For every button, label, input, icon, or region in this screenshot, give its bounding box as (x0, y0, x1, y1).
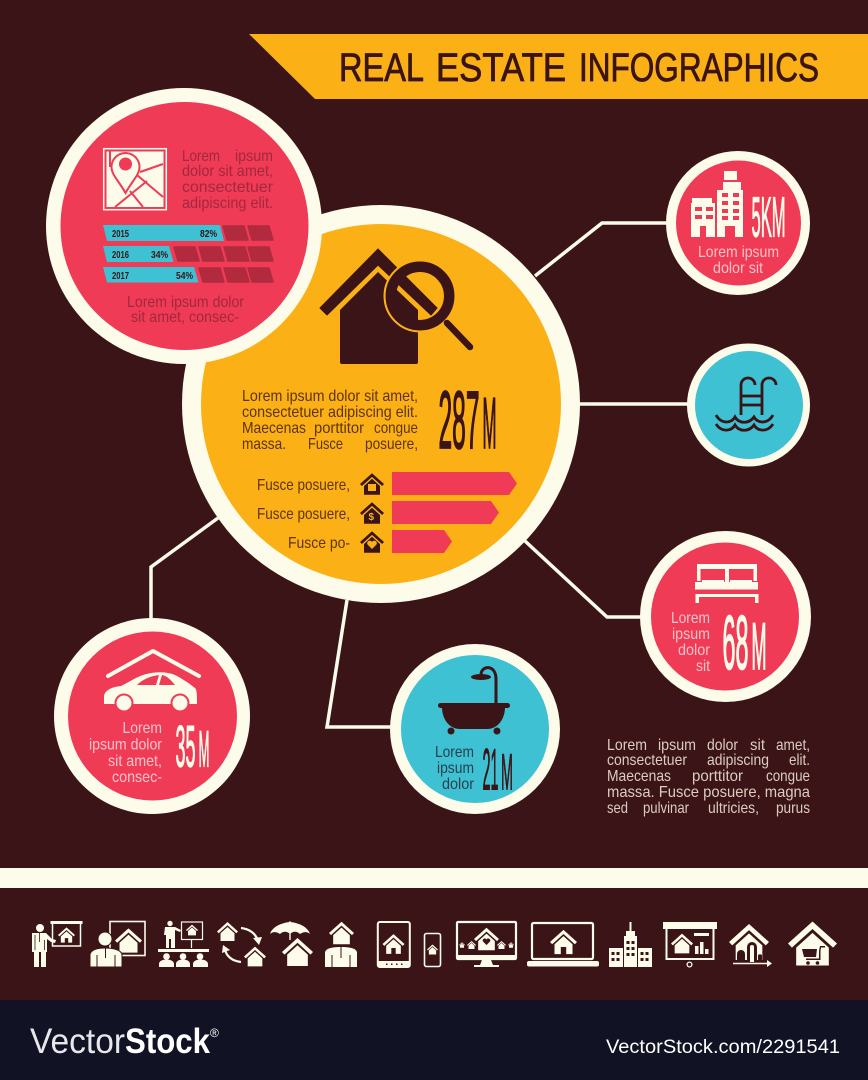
text block: bottom right lorem: consectetuer (607, 752, 688, 769)
arrow bar 1 (392, 472, 517, 495)
icon: pool ladder (716, 378, 776, 430)
text: 5KM caption: Lorem ipsum (698, 244, 779, 261)
watermark logo (30, 1022, 219, 1061)
icon: house heart (360, 531, 384, 553)
title: ESTATE (436, 46, 566, 90)
text: map lorem (182, 148, 274, 212)
number: 68M (722, 601, 766, 686)
arrow bar 2 (392, 501, 499, 524)
text block: bottom right lorem: sed (607, 800, 628, 817)
text block: bottom right lorem: purus (776, 800, 810, 817)
text: bath caption: ipsum (437, 760, 474, 777)
text block: bottom right lorem: sit (750, 737, 766, 754)
icon: bathtub (438, 668, 510, 734)
panel: 5KM circle: 5KM (752, 186, 786, 250)
number: 287M (438, 375, 496, 466)
text block: bottom right lorem: Maecenas (607, 768, 671, 785)
text: car caption: consec- (112, 769, 162, 786)
connector lines (151, 223, 689, 727)
text block: bottom right lorem: Lorem (607, 737, 647, 754)
text block: bottom right lorem: porttitor (692, 768, 744, 785)
number: 68M: 68 (722, 601, 748, 686)
icon: phone (424, 934, 440, 966)
text: bath caption: dolor (442, 776, 475, 793)
panel: main circle: M (482, 384, 496, 464)
row: fusce posuere 1: Fusce posuere, (257, 477, 350, 494)
panel: main circle: 287 (438, 375, 480, 466)
text: bed caption: dolor (678, 642, 711, 659)
text: map caption (127, 294, 245, 326)
text block: main lorem: Maecenas (242, 420, 306, 437)
panel: bath circle (390, 644, 560, 814)
panel: main circle (182, 205, 580, 603)
row: fusce posuere 2 (257, 501, 499, 524)
icon: agent with house (90, 922, 145, 967)
text: map lorem: ipsum (235, 148, 273, 165)
text: bed caption: ipsum (672, 626, 710, 643)
text block: bottom right lorem: pulvinar (643, 800, 690, 817)
number: 21M (482, 738, 513, 802)
text: car caption: sit amet, (108, 753, 162, 770)
text: 5KM caption: dolor sit (713, 260, 763, 277)
text block: bottom right lorem: adipiscing (707, 752, 769, 769)
icon: monitor (457, 922, 516, 967)
text: map lorem: Lorem (182, 148, 220, 165)
text block: bottom right lorem: elit. (789, 752, 810, 769)
watermark logo: Vector (30, 1022, 125, 1061)
text: 5KM caption (698, 244, 779, 277)
icon: house cycle (217, 922, 266, 966)
footer stripe (0, 868, 868, 888)
icon: house growth (729, 924, 772, 967)
icon: projector chart (663, 922, 717, 967)
panel: bath circle: M (501, 744, 513, 800)
icon: tablet (378, 922, 410, 967)
panel: 5KM circle (666, 151, 810, 295)
text block: main lorem: Lorem ipsum dolor sit amet, (242, 388, 418, 405)
text block: bottom right lorem: amet, (776, 737, 810, 754)
text block: main lorem: massa. (242, 436, 286, 453)
text: bath caption: Lorem (435, 744, 474, 761)
icon: car under roof (104, 651, 199, 712)
text: map lorem: consectetuer (182, 179, 274, 196)
text: bath caption (435, 744, 475, 793)
title: REAL (339, 46, 424, 90)
icon: house dollar: $ (368, 512, 374, 523)
icon: house head agent (325, 922, 357, 967)
row: fusce posuere 2: Fusce posuere, (257, 506, 350, 523)
bar chart: years: 54% (176, 270, 194, 282)
text block: main lorem: congue (374, 420, 418, 437)
row: fusce po: Fusce po- (288, 535, 350, 552)
bar chart: years: 2017 (112, 270, 129, 282)
text: bed caption: sit (696, 658, 710, 675)
icon: house with magnifier (320, 249, 470, 364)
text: map lorem: adipiscing elit. (182, 195, 273, 212)
panel: car circle: M (198, 720, 210, 778)
row: fusce posuere 1 (257, 472, 517, 495)
text block: bottom right lorem: dolor (707, 737, 739, 754)
text block: main lorem (242, 388, 418, 453)
number: 35M: 35 (176, 714, 196, 780)
icon: house dollar (360, 502, 384, 524)
text block: bottom right lorem: massa. Fusce posuere, magna (607, 784, 810, 801)
text block: main lorem: consectetuer adipiscing elit. (242, 404, 418, 421)
text block: bottom right lorem: congue (766, 768, 810, 785)
bar chart: years (103, 225, 273, 282)
icon row (32, 921, 837, 967)
panel: map circle (46, 88, 322, 364)
arrow bar 3 (392, 530, 452, 553)
text block: main lorem: Fusce (308, 436, 343, 453)
watermark id: VectorStock.com/2291541 (606, 1036, 840, 1058)
panel: car circle (54, 618, 250, 814)
icon: presenter (32, 921, 82, 967)
icon: seminar (158, 921, 209, 967)
watermark bar (0, 1000, 868, 1080)
bar chart: years: 82% (200, 228, 218, 240)
panel: pool circle (687, 344, 810, 466)
icon: house cart (788, 921, 837, 966)
watermark logo: ® (210, 1026, 219, 1040)
text: car caption (89, 720, 163, 786)
icon: buildings (691, 171, 743, 237)
panel: bed circle (640, 531, 811, 702)
text: map caption: sit amet, consec- (131, 309, 239, 326)
bar chart: years: 34% (151, 249, 169, 261)
text: bed caption: Lorem (671, 610, 710, 627)
bar chart: years: 2015 (112, 228, 129, 240)
title (339, 46, 819, 90)
text: map caption: Lorem ipsum dolor (127, 294, 245, 311)
text: bed caption (671, 610, 711, 675)
bar chart: years: 2016 (112, 249, 129, 261)
number: 35M (176, 714, 210, 780)
icon: house thumb (360, 473, 384, 495)
icon: bed (695, 564, 758, 603)
panel: bath circle: 21 (482, 738, 498, 802)
text block: main lorem: porttitor (314, 420, 365, 437)
icon: laptop (527, 923, 599, 966)
text: car caption: Lorem (122, 720, 162, 737)
icon: map pin (104, 149, 166, 210)
text: map lorem: dolor sit amet, (182, 163, 273, 180)
text block: bottom right lorem: ipsum (658, 737, 696, 754)
row: fusce po (288, 530, 452, 553)
text: car caption: ipsum dolor (89, 736, 163, 754)
text block: main lorem: posuere, (365, 436, 418, 453)
watermark logo: Stock (125, 1022, 210, 1061)
title banner (249, 34, 868, 99)
panel: bed circle: M (752, 609, 766, 683)
icon: umbrella house (270, 921, 313, 966)
text block: bottom right lorem: ultricies, (708, 800, 759, 817)
text block: bottom right lorem (607, 737, 810, 817)
icon: city (609, 922, 652, 967)
